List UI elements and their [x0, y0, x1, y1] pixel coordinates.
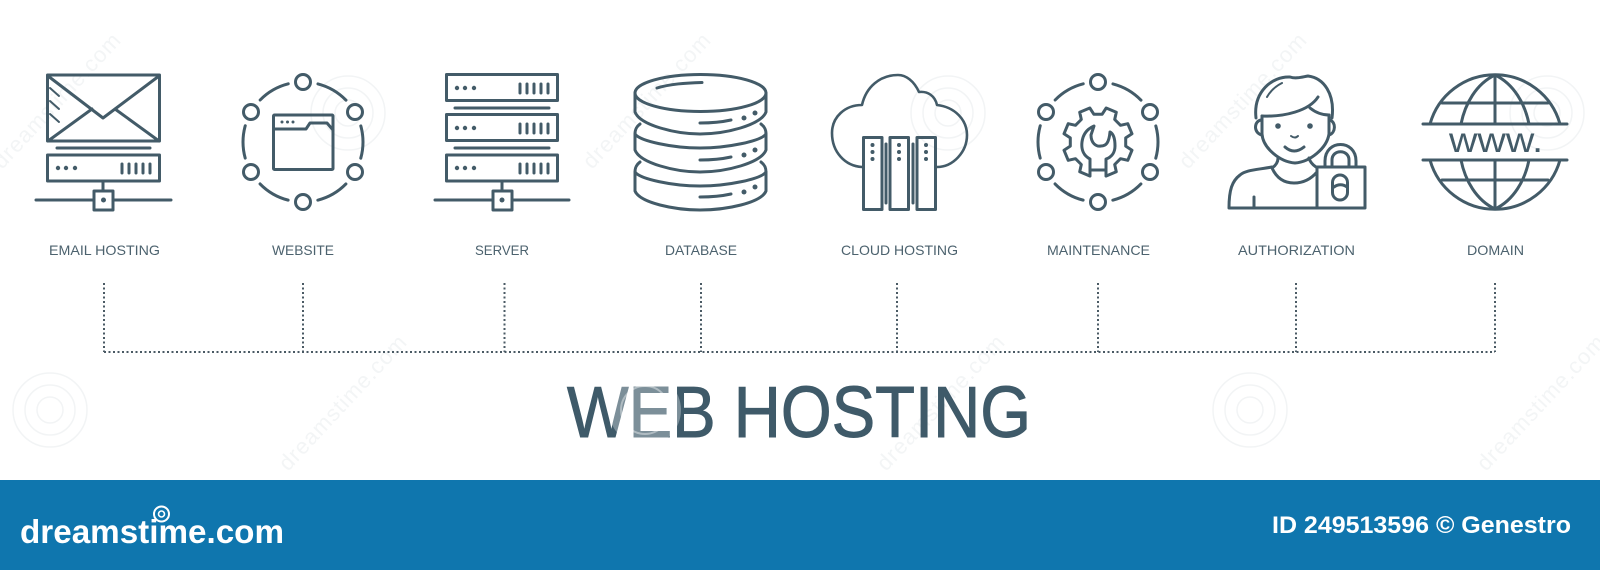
watermark over title: [609, 374, 681, 446]
icon: website: [243, 74, 363, 210]
icon: cloud hosting: [832, 75, 967, 210]
watermark pattern: dreamstime.com: [577, 27, 716, 173]
label: server: SERVER: [475, 242, 529, 258]
label: cloud hosting: CLOUD HOSTING: [841, 242, 958, 258]
icon: authorization: [1229, 76, 1365, 208]
footer logo: dreamstime.com: [20, 513, 284, 550]
title: WEB HOSTING: [567, 373, 1031, 453]
icon: email hosting: [36, 75, 171, 210]
footer image id and credit: ID 249513596 © Genestro: [1272, 512, 1571, 539]
watermark pattern: [0, 27, 1600, 475]
label: domain: DOMAIN: [1467, 242, 1524, 258]
icon: server: [435, 74, 569, 210]
watermark pattern: dreamstime.com: [1173, 27, 1312, 173]
label: database: DATABASE: [665, 242, 737, 258]
footer band: [0, 480, 1600, 570]
label: maintenance: MAINTENANCE: [1047, 242, 1150, 258]
icon: domain: www.: [1448, 121, 1543, 160]
watermark pattern: dreamstime.com: [273, 329, 412, 475]
watermark pattern: dreamstime.com: [871, 329, 1010, 475]
label: email hosting: EMAIL HOSTING: [49, 242, 160, 258]
icon: database: [635, 74, 766, 210]
dotted connector bracket: [104, 283, 1495, 352]
icon: maintenance: [1038, 74, 1158, 210]
label: website: WEBSITE: [272, 242, 334, 258]
label: authorization: AUTHORIZATION: [1238, 242, 1355, 258]
icon: domain: [1423, 75, 1567, 209]
